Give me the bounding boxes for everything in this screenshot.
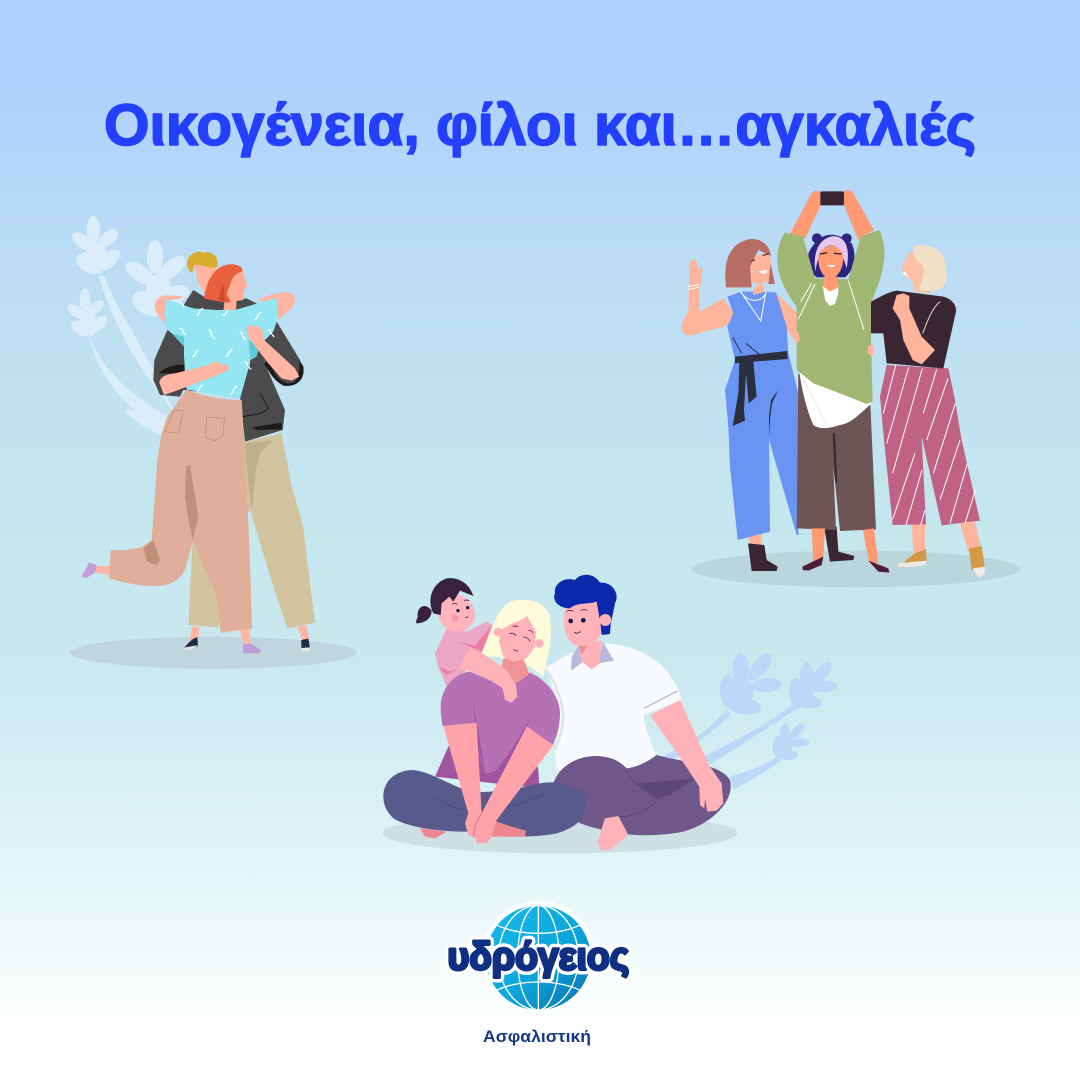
illustration: hugging couple [65, 216, 357, 669]
illustration: seated family [383, 575, 838, 853]
ground shadow [70, 637, 357, 669]
woman left: belt [733, 351, 788, 426]
girl: back of body [435, 622, 493, 687]
man: arm and hand [650, 700, 723, 812]
logo [447, 901, 629, 1015]
globe [481, 901, 595, 1015]
man: dark hoodie [153, 290, 303, 442]
girl: head and hair [438, 595, 475, 632]
illustration: three friends with selfie [681, 190, 1020, 587]
ground shadow [383, 813, 737, 853]
man: trousers [553, 755, 731, 835]
woman: neck, head and hair [223, 297, 237, 312]
woman left: head and hair [748, 252, 772, 284]
man: head and hair [564, 600, 603, 646]
wordmark: υδρόγειος [447, 934, 629, 978]
woman right: legs and sneakers [912, 522, 982, 555]
man: collar [571, 642, 614, 671]
man: shoes and ankles [190, 625, 309, 645]
decorative plants [65, 216, 192, 435]
woman center: trousers and flats [797, 373, 876, 531]
woman right: head and hair [901, 252, 930, 293]
ground shadow [692, 551, 1020, 587]
man: white polo [546, 643, 682, 770]
man: foot [597, 816, 628, 850]
logo subtitle: Ασφαλιστική [483, 1027, 591, 1046]
woman left: legs and boots [748, 533, 762, 547]
woman: patterned top [164, 298, 277, 399]
man: trousers [188, 433, 315, 628]
woman center: white undershirt [799, 372, 872, 428]
woman right: striped trousers [880, 365, 980, 525]
man: back arms [155, 292, 295, 323]
woman right: arm on chest [893, 293, 935, 364]
wordmark halo: υδρόγειος [447, 934, 629, 978]
woman: blonde hair [480, 600, 551, 677]
woman left: waving arm [681, 260, 733, 335]
woman: purple tee [441, 672, 560, 773]
woman left: blue jumpsuit [725, 292, 833, 540]
title: Οικογένεια, φίλοι και…αγκαλιές [104, 93, 976, 158]
woman: arms hugging [159, 361, 228, 395]
woman: wide trousers [109, 389, 252, 633]
woman: dress lower [435, 723, 539, 788]
hands on waist [793, 332, 875, 356]
woman center: green sweater [777, 230, 884, 404]
decorative plants [663, 649, 838, 789]
woman right: black tee [871, 291, 956, 368]
woman center: head and hair [815, 236, 848, 272]
woman: neck and face [500, 658, 530, 685]
woman center: arms raised [789, 190, 874, 240]
woman: raised foot [95, 566, 109, 575]
girl: arm over shoulder [458, 648, 517, 703]
woman: blue-grey trousers [383, 770, 586, 837]
woman center: hair back [807, 235, 854, 277]
man: head and hair [194, 263, 217, 293]
woman: crossed arms [443, 723, 483, 838]
woman center: phone [820, 191, 844, 205]
woman: feet [420, 828, 447, 838]
